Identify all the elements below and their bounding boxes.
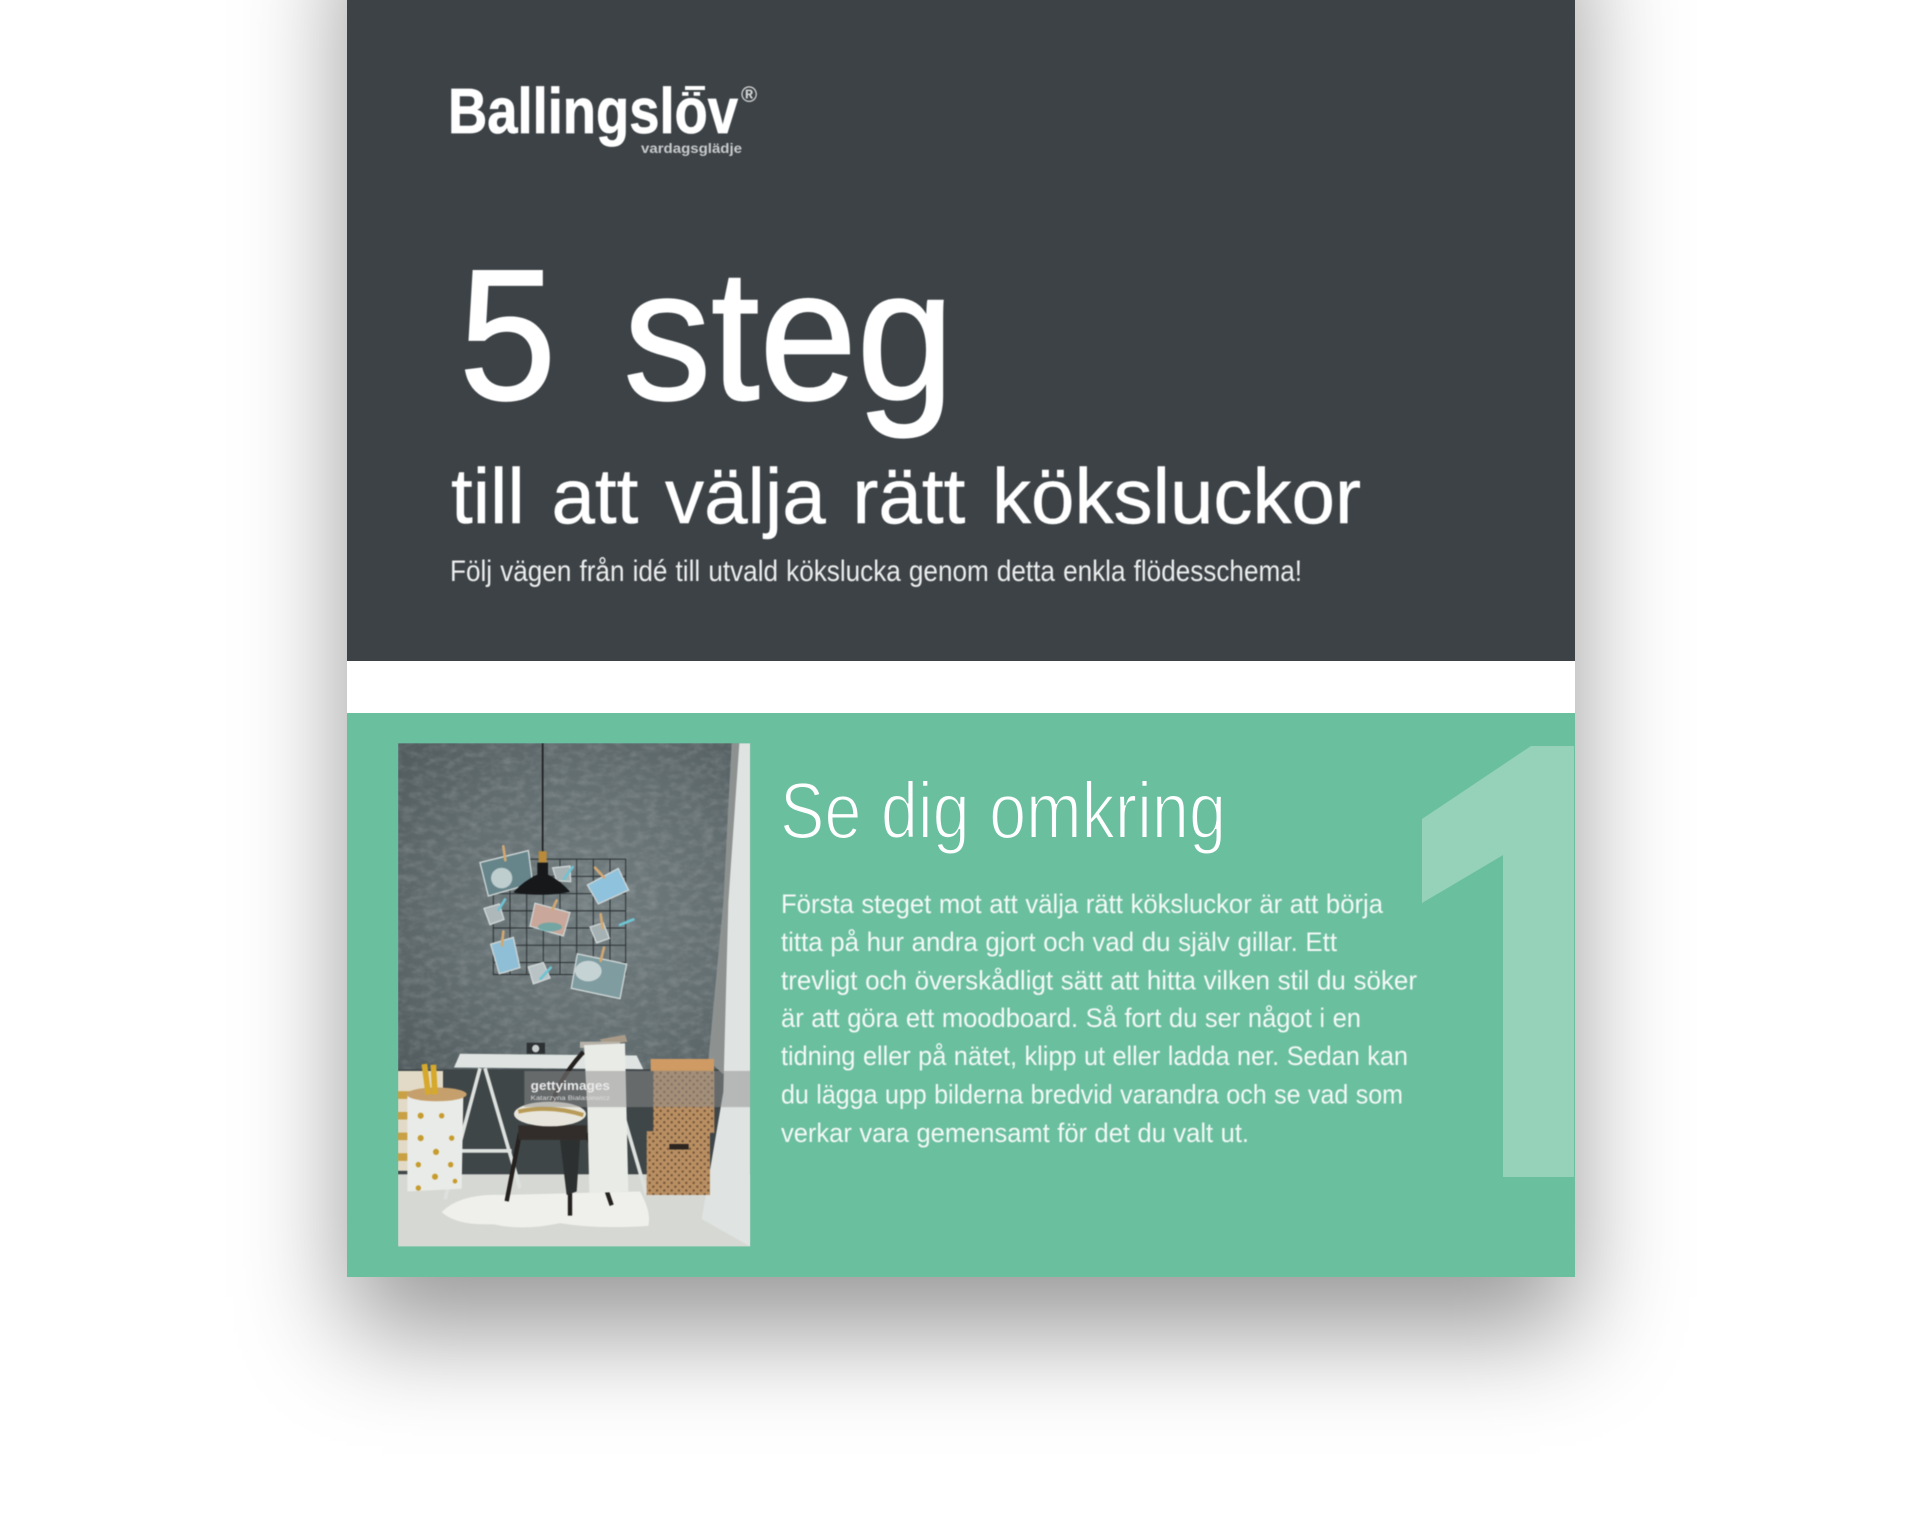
curtain [708,743,742,1074]
step body text: verkar vara gemensamt för det du valt ut. [781,1118,1249,1148]
watermark [524,1071,750,1107]
watermark: Katarzyna Bialasiewicz [531,1095,610,1102]
step heading: Se dig omkring [780,766,1226,855]
wall [398,743,750,1074]
header panel [347,0,1575,661]
logo: vardagsglädje [641,140,742,156]
clips [499,846,633,979]
title: 5 steg: 5 steg [459,232,954,439]
watermark: gettyimages [531,1078,610,1093]
lamp cord [541,743,544,852]
chair and pillow [507,1052,612,1216]
rug [442,1191,649,1227]
step body text: titta på hur andra gjort och vad du själv gillar. Ett [781,927,1337,957]
wire grid [493,859,626,975]
step body text: du lägga upp bilderna bredvid varandra och se vad som [781,1080,1403,1110]
moodboard photos [480,851,629,999]
step body text: är att göra ett moodboard. Så fort du ser något i en [781,1003,1361,1033]
step body text: tidning eller på nätet, klipp ut eller ladda ner. Sedan kan [781,1041,1408,1071]
blanket [584,1043,628,1193]
desk [445,1035,647,1199]
big numeral 1 [1422,746,1574,1177]
step body text: trevligt och överskådligt sätt att hitta vilken stil du söker [781,966,1417,996]
photo: desk with moodboard [398,743,750,1247]
step body text: Första steget mot att välja rätt köksluckor är att börja [781,889,1384,919]
polka dot bag [398,1064,467,1191]
infographic artwork [347,0,1575,1277]
storage boxes [647,1059,714,1195]
panel: step 1 [347,713,1575,1277]
logo: ® [741,82,757,107]
big numeral 1: 1 [1400,635,1734,1305]
subtitle: till att välja rätt köksluckor [451,452,1361,540]
pendant lamp [513,851,570,895]
logo: Ballingslöv [448,75,738,147]
step body text [781,889,1417,1148]
intro line: Följ vägen från idé till utvald kökslucka genom detta enkla flödesschema! [450,555,1302,588]
page shadow [347,0,1575,1277]
